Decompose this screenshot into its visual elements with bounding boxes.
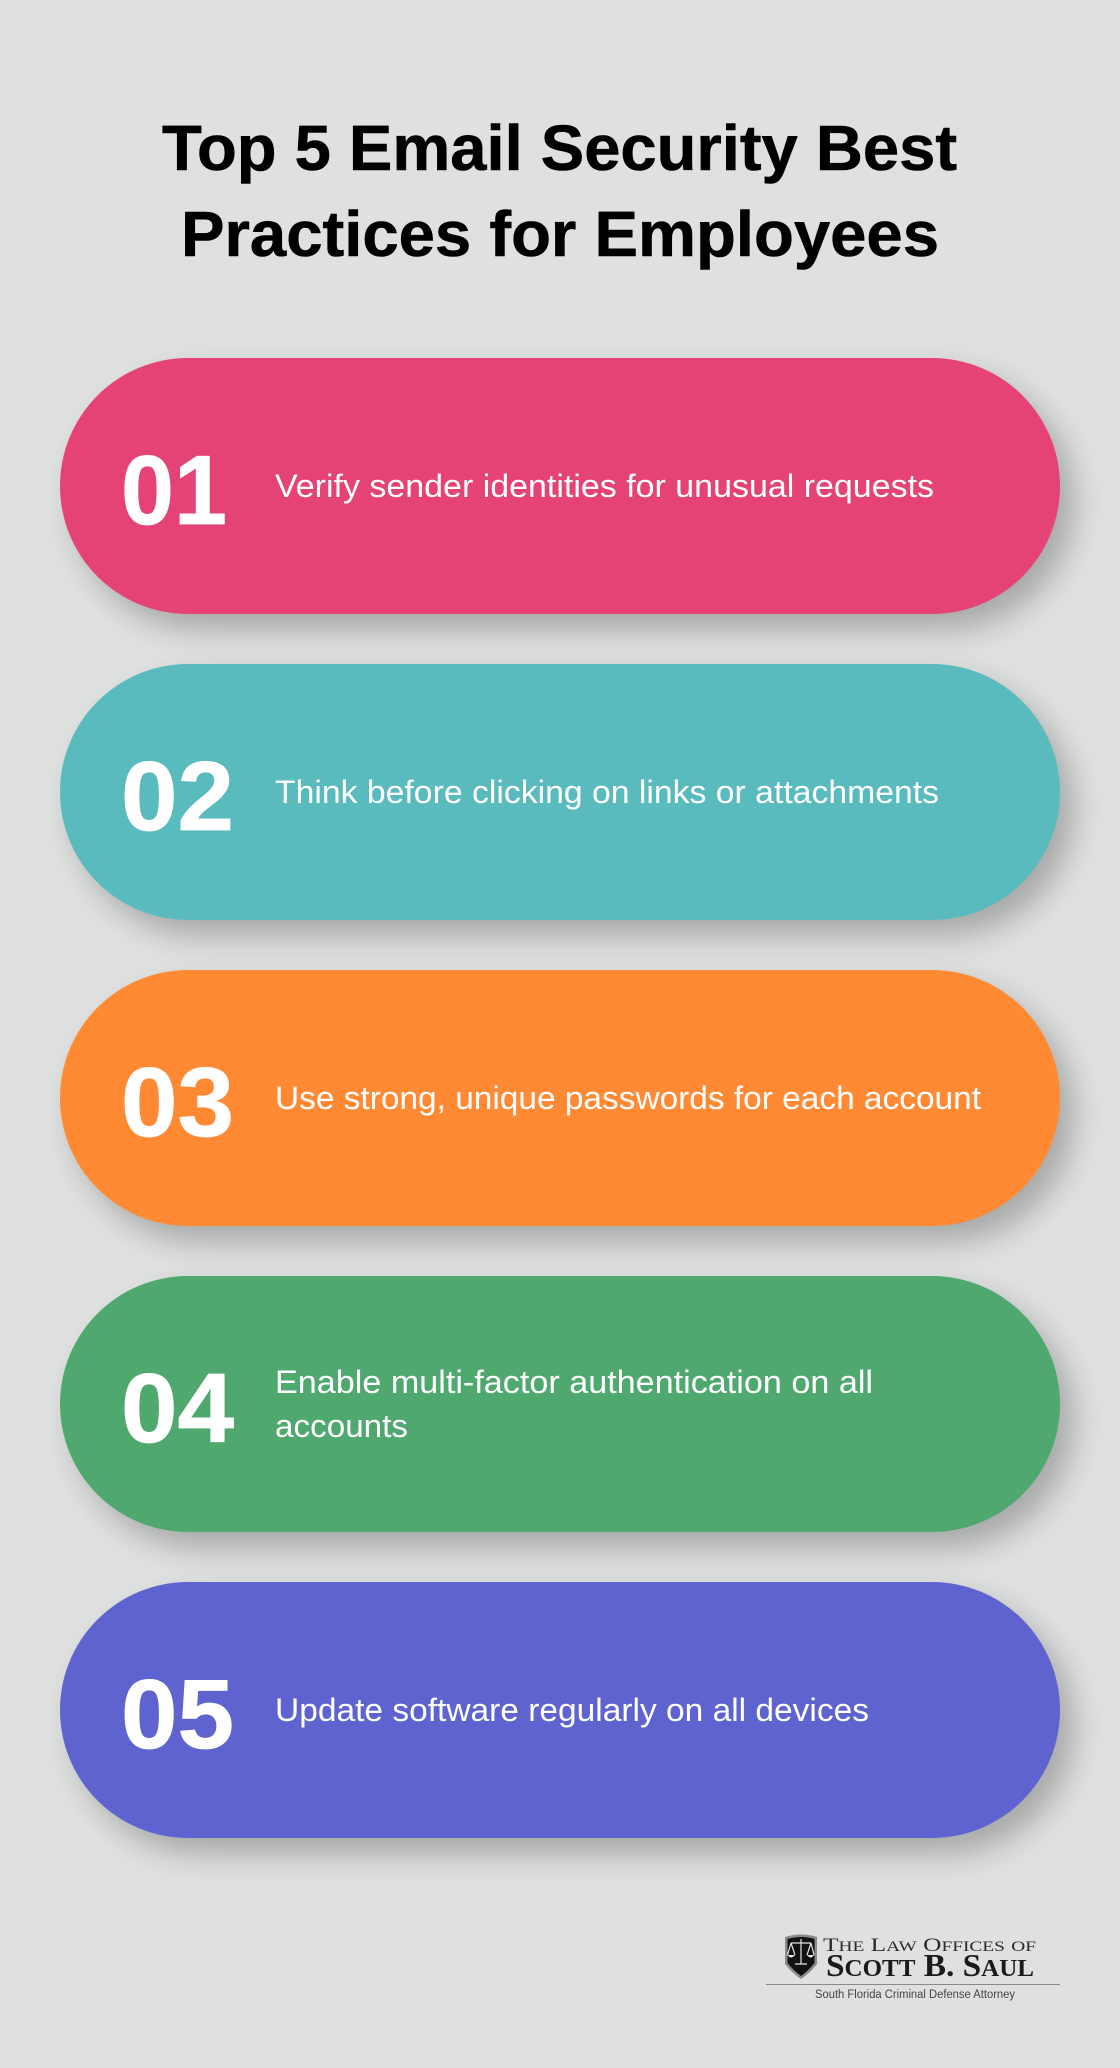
panel: step 02 pill: [60, 664, 1060, 920]
step 02 content: [121, 741, 939, 851]
step 01 content: Verify sender identities for unusual requests: [275, 468, 934, 504]
step 03 content: 03: [121, 1047, 234, 1157]
step 04 content: accounts: [275, 1408, 408, 1444]
step 04 content: Enable multi-factor authentication on all: [275, 1364, 873, 1400]
panel: step 04 pill: [60, 1276, 1060, 1532]
logo firm name line 2: SCOTT B. SAUL: [826, 1947, 1034, 1983]
panel: step 03 pill: [60, 970, 1060, 1226]
icon: shield with scales: [785, 1934, 817, 1979]
logo firm name line 1: T HE L AW O FFICES OF: [823, 1935, 1036, 1956]
panel: step 05 pill: [60, 1582, 1060, 1838]
logo: The Law Offices of Scott B. Saul: [766, 1934, 1060, 2001]
step 05 content: [121, 1659, 869, 1769]
title: Top 5 Email Security Best: [162, 112, 957, 184]
step 05 content: Update software regularly on all devices: [275, 1692, 869, 1728]
step 01 content: 01: [121, 435, 227, 545]
step 04 content: 04: [121, 1353, 234, 1463]
step 03 content: [121, 1047, 981, 1157]
step 05 content: 05: [121, 1659, 234, 1769]
title: [162, 112, 957, 270]
title: Practices for Employees: [181, 198, 939, 270]
step 02 content: 02: [121, 741, 234, 851]
step 01 content: [121, 435, 934, 545]
step 03 content: Use strong, unique passwords for each account: [275, 1080, 981, 1116]
step 04 content: [121, 1353, 873, 1463]
logo tagline: South Florida Criminal Defense Attorney: [815, 1989, 1015, 2001]
panel: step 01 pill: [60, 358, 1060, 614]
step 02 content: Think before clicking on links or attachments: [275, 774, 939, 810]
